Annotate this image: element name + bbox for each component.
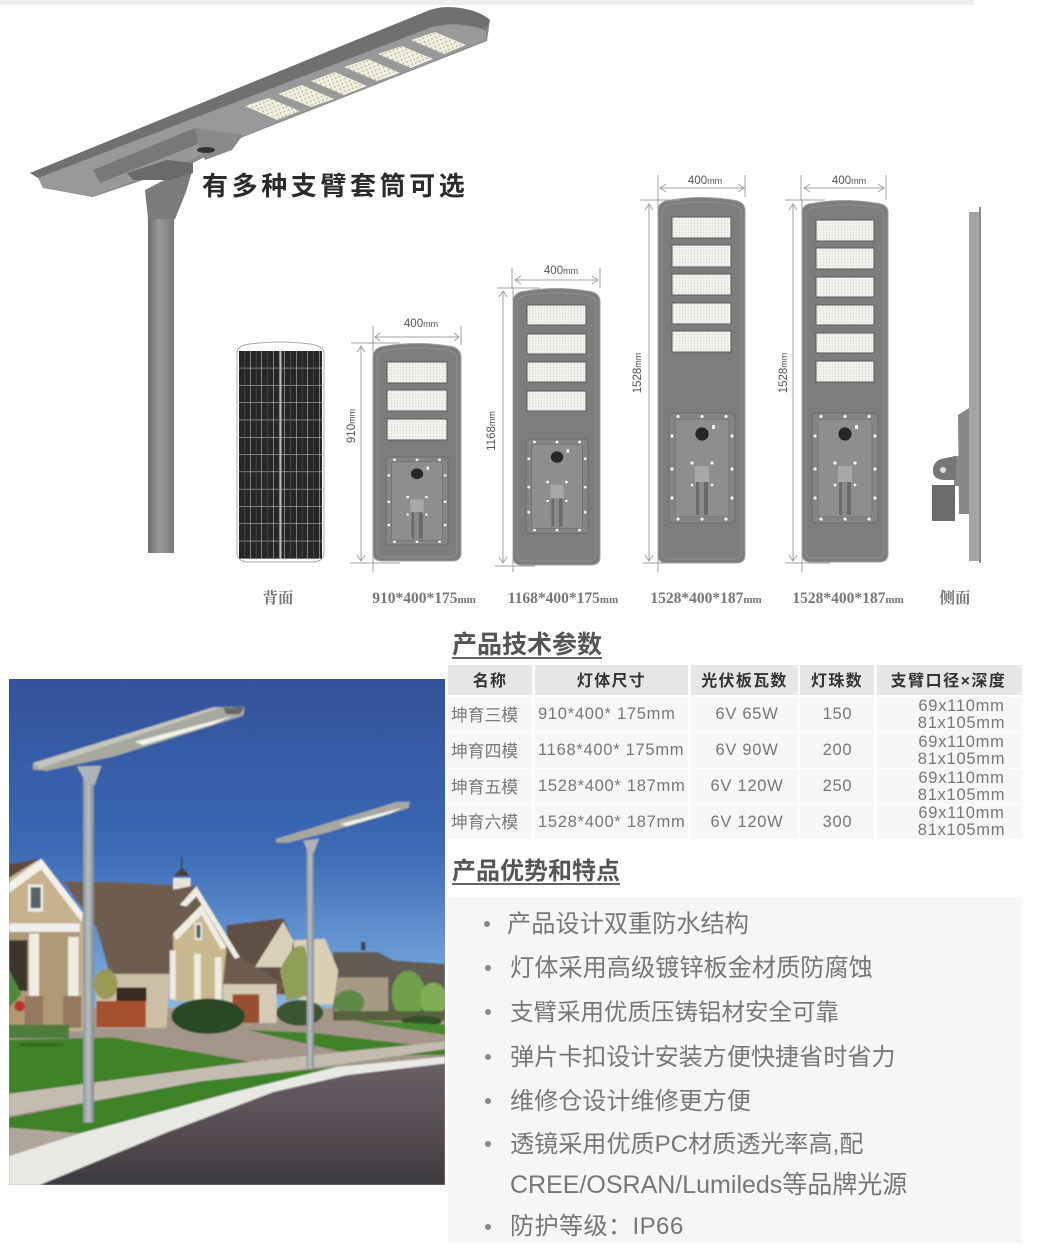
feature list: 产品设计双重防水结构	[507, 911, 749, 938]
row: 六模: 81x105mm	[918, 821, 1005, 839]
row: 三模: 69x110mm	[918, 696, 1005, 714]
top grey strip	[0, 0, 974, 5]
feature list: 灯体采用高级镀锌板金材质防腐蚀	[510, 955, 873, 982]
row: 三模: 910*400* 175mm	[538, 705, 676, 723]
feature list: 透镜采用优质PC材质透光率高,配	[510, 1131, 863, 1158]
title: 有多种支臂套筒可选	[202, 171, 468, 201]
dimension labels: 1528mm	[632, 353, 644, 393]
row: 五模: 1528*400* 187mm	[538, 777, 685, 795]
row: 三模	[451, 696, 1005, 732]
lamp posts	[83, 771, 94, 1123]
captions under drawings: 1168*400*175mm	[508, 590, 618, 607]
dimension labels: 400mm	[544, 265, 578, 277]
row: 六模: 6V 120W	[711, 812, 783, 830]
row: 三模: 坤育三模	[451, 706, 518, 724]
captions under drawings: 910*400*175mm	[372, 590, 476, 607]
row: 四模: 69x110mm	[918, 732, 1005, 750]
feature list	[484, 911, 907, 1240]
captions under drawings	[262, 588, 971, 607]
table header row: 光伏板瓦数	[701, 673, 788, 690]
dimension labels: 1168mm	[486, 411, 498, 451]
row: 五模: 坤育五模	[451, 778, 518, 796]
feature list: 弹片卡扣设计安装方便快捷省时省力	[510, 1044, 896, 1071]
feature list: 维修仓设计维修更方便	[510, 1088, 751, 1115]
captions under drawings: 背面	[262, 588, 294, 607]
feature list: CREE/OSRAN/Lumileds等品牌光源	[510, 1171, 907, 1199]
lamp: 4 module	[513, 288, 600, 565]
table header row: 支臂口径×深度	[891, 673, 1006, 690]
row: 五模: 69x110mm	[918, 768, 1005, 786]
lamp: 5 module	[658, 198, 745, 563]
dimension labels: 910mm	[346, 409, 358, 443]
heading: technical specs: 产品技术参数	[452, 631, 602, 659]
table header row: 灯体尺寸	[577, 673, 646, 690]
heading: advantages: 产品优势和特点	[452, 858, 620, 885]
features panel	[448, 897, 1022, 1243]
row: 五模: 250	[823, 777, 852, 795]
table header row: 名称	[473, 673, 507, 690]
row: 六模: 69x110mm	[918, 804, 1005, 822]
feature list: 防护等级：IP66	[510, 1213, 684, 1240]
row: 四模: 200	[823, 741, 852, 759]
feature list: 支臂采用优质压铸铝材安全可靠	[510, 999, 839, 1025]
row: 四模: 1168*400* 175mm	[538, 741, 684, 759]
lamp: 6 module	[802, 200, 888, 562]
main houses	[226, 918, 338, 994]
row: 四模: 坤育四模	[451, 742, 518, 760]
row: 五模	[451, 768, 1005, 804]
dimension labels	[346, 175, 866, 451]
LED panels on angled lamp	[245, 32, 466, 120]
dimension labels: 400mm	[404, 318, 438, 330]
lamp side view	[932, 207, 981, 563]
angled lamp with pole	[30, 7, 490, 553]
table header row: 灯珠数	[811, 673, 863, 690]
solar panel back view	[237, 342, 324, 562]
row: 六模: 坤育六模	[451, 813, 518, 832]
spec table	[448, 665, 1022, 839]
row: 三模: 81x105mm	[918, 714, 1005, 732]
captions under drawings: 侧面	[939, 589, 971, 607]
row: 四模: 81x105mm	[918, 750, 1005, 768]
row: 三模: 6V 65W	[715, 705, 778, 723]
table header row	[448, 665, 1022, 695]
row: 六模: 1528*400* 187mm	[538, 812, 685, 830]
row: 五模: 81x105mm	[918, 786, 1005, 804]
shrubs and trees	[171, 999, 245, 1034]
row: 四模: 6V 90W	[715, 741, 778, 759]
dimension lines	[350, 175, 886, 572]
dimension labels: 1528mm	[778, 353, 790, 393]
far houses	[333, 952, 445, 1018]
lamp: 3 module	[373, 344, 461, 561]
row: 三模: 150	[823, 705, 852, 723]
row: 五模: 6V 120W	[711, 777, 783, 795]
product drawings	[30, 7, 981, 607]
curb	[9, 1057, 445, 1185]
captions under drawings: 1528*400*187mm	[650, 590, 762, 607]
row: 六模	[451, 804, 1005, 839]
captions under drawings: 1528*400*187mm	[792, 590, 904, 607]
dimension labels: 400mm	[832, 175, 866, 187]
street photo	[9, 679, 445, 1185]
row: 四模	[451, 732, 1005, 768]
road	[40, 1063, 445, 1185]
row: 六模: 300	[823, 812, 852, 830]
dimension labels: 400mm	[688, 175, 722, 187]
lawns	[9, 1037, 250, 1094]
